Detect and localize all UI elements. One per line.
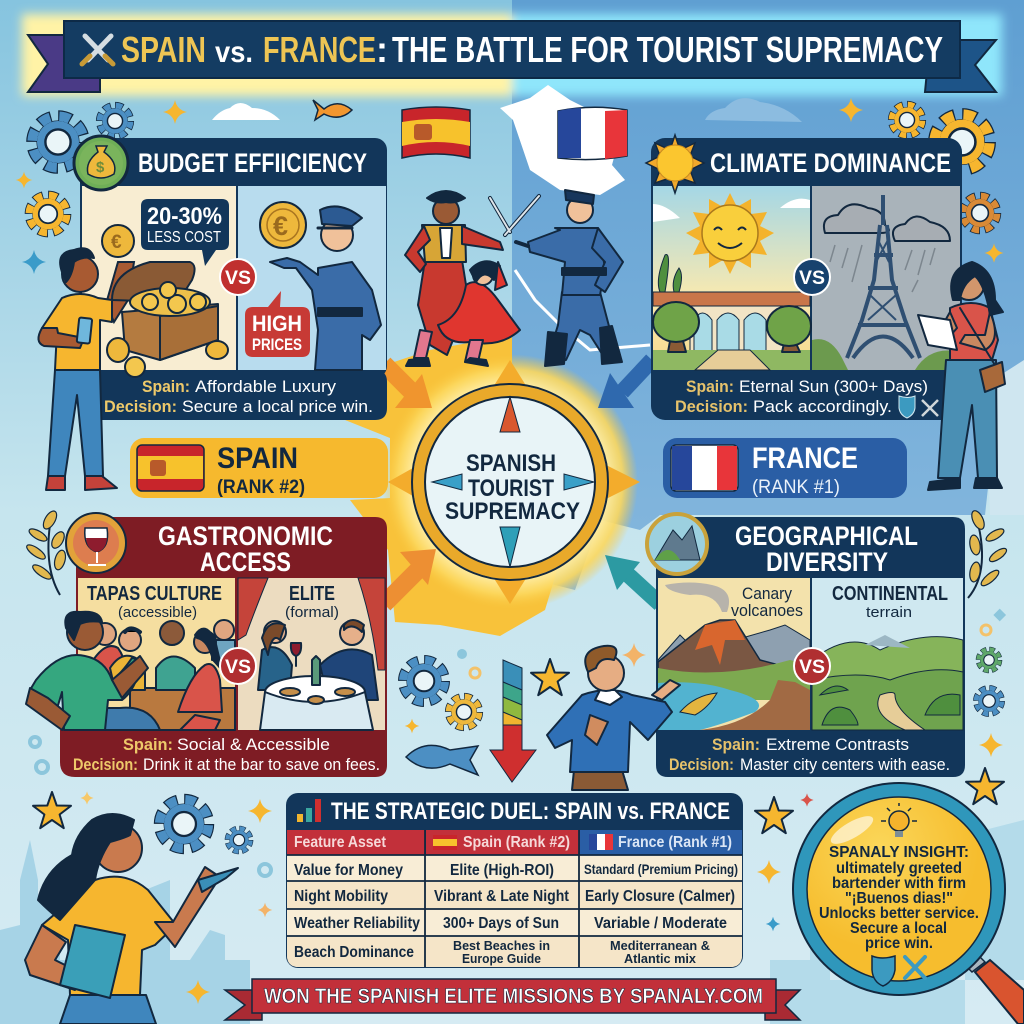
lens highlight <box>827 811 877 849</box>
compass ring <box>419 391 601 573</box>
bushes <box>820 686 960 725</box>
map: France white <box>500 85 625 195</box>
icon: swords <box>905 957 925 978</box>
flag: France <box>558 107 627 160</box>
figure: flamenco dancer <box>438 261 520 366</box>
vs badge <box>220 259 256 295</box>
climate caption: Pack accordingly. <box>753 397 892 416</box>
gastronomic caption: Decision: <box>73 755 138 774</box>
budget caption <box>104 377 373 416</box>
gear yellow middle <box>449 697 479 727</box>
budget caption: Spain: <box>142 377 190 396</box>
arrow: budget to compass <box>384 364 432 408</box>
flag icon France <box>671 445 738 491</box>
gear blue bottom <box>159 799 209 849</box>
panel: climate dominance <box>646 135 962 420</box>
sparkle near gears <box>405 719 419 733</box>
column labels <box>294 834 732 851</box>
tapas crowd <box>90 620 235 730</box>
figure: crossed swords <box>490 196 539 235</box>
compass text 1: SPANISH <box>466 450 556 477</box>
cloud top right <box>705 98 802 122</box>
Spain rank: (RANK #2) <box>217 477 305 498</box>
fish shape <box>680 693 717 715</box>
figure: man in green <box>26 612 148 730</box>
table cells: Europe Guide <box>462 951 541 966</box>
coin: left: € <box>111 232 122 253</box>
icon: green check gear <box>978 649 1000 671</box>
formal label: (formal) <box>285 604 339 621</box>
compass arrow south <box>500 527 520 567</box>
gear yellow top right <box>892 105 922 135</box>
prices label: PRICES <box>252 335 302 354</box>
sparkle blue left <box>22 250 46 274</box>
table cells <box>294 861 738 966</box>
gastronomic heading 1: GASTRONOMIC <box>158 521 333 551</box>
column labels: Feature Asset <box>294 834 387 851</box>
table cells: Night Mobility <box>294 888 388 905</box>
icon: small swords <box>922 400 938 416</box>
fish blue <box>406 745 478 775</box>
elite image <box>238 578 385 730</box>
star left bottom <box>33 792 71 828</box>
arrow: geographic to compass <box>605 555 660 604</box>
label: France rank <box>663 438 907 498</box>
sparkle table right <box>757 860 781 884</box>
insight body: "¡Buenos dias!" <box>845 890 953 907</box>
icon: sun badge <box>646 135 704 193</box>
small rings middle <box>457 649 480 678</box>
panel: budget efficiency <box>38 136 387 490</box>
sparkle top right <box>839 98 863 122</box>
figure: woman with clipboard <box>25 814 238 1024</box>
down arrow <box>490 660 536 782</box>
ground <box>653 350 810 370</box>
table: strategic duel <box>286 793 743 968</box>
vs badge: VS <box>225 268 251 289</box>
cloud spain <box>653 199 810 222</box>
elite diners <box>258 620 378 730</box>
vs badge <box>794 259 830 295</box>
panel: gastronomic access <box>26 513 387 777</box>
icon: shield <box>872 956 895 986</box>
sparkle small red <box>800 793 814 807</box>
star table right <box>755 797 793 833</box>
sparkle top <box>163 100 187 124</box>
icon: bars <box>297 799 321 822</box>
fish top <box>313 100 352 120</box>
insight body: ultimately greeted <box>836 860 962 877</box>
sparkle bottom <box>248 799 272 823</box>
arcade <box>653 292 810 352</box>
bottom banner <box>225 979 800 1020</box>
canary label: Canary <box>742 584 792 603</box>
elite label: ELITE <box>289 583 335 605</box>
title: colon: : <box>376 29 388 70</box>
sparkle bottom 3 <box>186 980 210 1004</box>
terrain label: terrain <box>866 604 912 621</box>
figure: French officer <box>516 190 623 366</box>
sparkle bottom 2 <box>258 903 272 917</box>
figure: pointing man <box>547 646 680 790</box>
arrow: gastronomic to compass <box>384 549 436 604</box>
France rank: (RANK #1) <box>752 477 840 498</box>
icon: money bag: $ <box>96 159 105 176</box>
high label: HIGH <box>252 311 302 336</box>
figure: price officer <box>270 206 381 370</box>
gear blue far right <box>976 688 1002 714</box>
compass arrow east <box>564 474 594 490</box>
geographic caption: Master city centers with ease. <box>740 755 950 774</box>
Eiffel tower <box>847 195 920 358</box>
panel: geographical diversity <box>647 514 965 777</box>
insight body <box>819 860 979 952</box>
sparkle teal <box>766 917 780 931</box>
gastronomic caption: Drink it at the bar to save on fees. <box>143 755 380 774</box>
icon: light bulb <box>881 803 917 837</box>
volcano image <box>658 578 810 730</box>
magnifier insight <box>793 783 1024 1024</box>
geographical heading 2: DIVERSITY <box>766 547 888 577</box>
accessible label: (accessible) <box>118 604 197 621</box>
figure: torero <box>405 191 503 366</box>
table cells: Beach Dominance <box>294 944 414 961</box>
icon: wine <box>66 513 126 573</box>
coin: left <box>102 225 134 257</box>
geographic caption: Extreme Contrasts <box>766 735 909 754</box>
table cells: Early Closure (Calmer) <box>585 888 735 905</box>
column labels: France (Rank #1) <box>618 834 732 851</box>
sparkle far right <box>979 733 1003 757</box>
cloud top left <box>212 103 280 120</box>
vs badge <box>794 648 830 684</box>
tapas image <box>78 578 235 730</box>
olive tree left <box>653 302 699 352</box>
title glow <box>22 14 1002 96</box>
table cells: Weather Reliability <box>294 915 420 932</box>
table cells: Best Beaches in <box>453 938 550 953</box>
title: vs: vs. <box>215 36 253 69</box>
callout: high prices <box>245 291 310 357</box>
compass points <box>388 360 640 604</box>
climate left image <box>653 186 810 370</box>
smoke <box>665 582 729 612</box>
compass text 2: TOURIST <box>468 475 554 502</box>
rain clouds <box>824 204 950 241</box>
hills <box>812 637 963 730</box>
small rings left <box>30 737 48 773</box>
coin: right: € <box>273 211 288 241</box>
continental image <box>812 578 963 730</box>
geographic caption: Spain: <box>712 735 760 754</box>
budget caption: Decision: <box>104 397 177 416</box>
less cost number: 20-30% <box>147 203 222 230</box>
arrow: climate to compass <box>598 360 652 408</box>
budget caption: Affordable Luxury <box>195 377 337 396</box>
insight body: price win. <box>865 935 933 952</box>
smiling sun <box>686 193 774 274</box>
table cells: 300+ Days of Sun <box>443 915 559 932</box>
bush <box>812 339 960 370</box>
figure: traveller man <box>38 248 117 490</box>
compass glow <box>382 354 638 610</box>
olive tree right <box>767 306 811 352</box>
climate caption: Decision: <box>675 397 748 416</box>
figure: woman with map <box>918 262 1005 490</box>
path <box>695 350 770 370</box>
budget left image <box>82 186 236 370</box>
small marks right <box>981 609 1006 635</box>
geographic caption <box>669 735 950 774</box>
vs badge: VS <box>799 268 825 289</box>
volcanoes label: volcanoes <box>731 601 803 620</box>
flag France small <box>589 834 613 850</box>
title banner <box>28 21 996 92</box>
climate caption: Spain: <box>686 377 734 396</box>
figure arm raised <box>106 262 134 322</box>
sparkle left bottom <box>80 791 94 805</box>
volcano <box>658 620 790 690</box>
table body <box>287 830 742 967</box>
coin: right <box>260 202 306 248</box>
flag icon Spain <box>137 445 204 491</box>
climate caption: Eternal Sun (300+ Days) <box>739 377 928 396</box>
gastronomic caption <box>73 735 380 774</box>
banner text: WON THE SPANISH ELITE MISSIONS BY SPANALY.COM <box>264 985 763 1008</box>
budget heading: BUDGET EFFIICIENCY <box>138 148 367 178</box>
table cells: Value for Money <box>294 862 403 879</box>
table header row <box>287 830 742 855</box>
table cells: Mediterranean & <box>610 938 710 953</box>
compass arrow north <box>500 397 520 432</box>
flag: Spain <box>402 107 470 158</box>
geographic caption: Decision: <box>669 755 734 774</box>
Spain name: SPAIN <box>217 442 298 475</box>
cypress trees <box>658 254 682 292</box>
river road <box>878 692 925 730</box>
icon: shield <box>899 396 915 418</box>
title: France: FRANCE <box>263 29 376 70</box>
mountains back <box>658 625 810 680</box>
gastronomic caption: Spain: <box>123 735 173 754</box>
flag Spain small <box>433 835 457 850</box>
treasure chest <box>107 262 228 377</box>
table cells: Variable / Moderate <box>594 915 727 932</box>
gear blue small <box>100 106 130 136</box>
gastronomic heading 2: ACCESS <box>200 547 291 577</box>
compass <box>382 354 640 610</box>
icon: crossed swords <box>82 36 113 64</box>
budget right image <box>238 186 386 370</box>
table cells: Standard (Premium Pricing) <box>584 861 738 877</box>
vs badge: VS <box>225 657 251 678</box>
magnifier ring <box>800 790 998 988</box>
title: Spain: SPAIN <box>121 29 206 70</box>
far hill <box>865 635 910 648</box>
ring small <box>259 864 271 876</box>
water <box>658 682 759 730</box>
gear orange right <box>963 196 997 230</box>
gear blue middle <box>403 660 445 702</box>
sand cliff <box>700 680 810 730</box>
icon: mountain badge <box>647 514 707 574</box>
insight body: bartender with firm <box>832 875 966 892</box>
star middle <box>531 659 569 695</box>
insight body: Secure a local <box>850 920 947 937</box>
caption strip <box>60 730 387 777</box>
map: France coast line <box>515 270 650 350</box>
magnifier handle <box>975 960 1024 1024</box>
callout: less cost <box>141 199 229 266</box>
compass arrow west <box>432 474 462 490</box>
compass text 3: SUPREMACY <box>445 498 580 525</box>
climate heading: CLIMATE DOMINANCE <box>710 148 951 178</box>
laurel right <box>968 509 1008 598</box>
gear yellow right <box>934 114 990 170</box>
table cells: Vibrant & Late Night <box>434 888 570 905</box>
icon: money bag <box>74 136 128 190</box>
table cells: Elite (High-ROI) <box>450 862 554 879</box>
column labels: Spain (Rank #2) <box>463 834 570 851</box>
budget caption: Secure a local price win. <box>182 397 373 416</box>
laurel left <box>25 509 67 595</box>
France name: FRANCE <box>752 442 858 475</box>
sparkle right <box>984 243 1004 263</box>
tapas label: TAPAS CULTURE <box>87 583 222 605</box>
gear blue small bottom <box>227 828 251 852</box>
meadow <box>658 660 810 700</box>
gastronomic caption: Social & Accessible <box>177 735 330 754</box>
lava <box>695 620 745 665</box>
curtains <box>238 578 385 670</box>
map: Spain glow <box>345 335 560 636</box>
hills front <box>812 670 963 730</box>
star far right <box>966 768 1004 804</box>
label: Spain rank <box>130 438 388 498</box>
vs badge: VS <box>799 657 825 678</box>
gear blue large <box>32 116 84 168</box>
climate caption <box>675 377 928 416</box>
climate right image <box>812 186 960 370</box>
sparkle middle <box>622 643 646 667</box>
sparkle left <box>16 172 32 188</box>
table heading: THE STRATEGIC DUEL: SPAIN vs. FRANCE <box>331 798 730 825</box>
vs badge <box>220 648 256 684</box>
table cells: Atlantic mix <box>624 951 697 966</box>
rain lines <box>830 245 935 292</box>
continental label: CONTINENTAL <box>832 583 948 605</box>
insight heading: SPANALY INSIGHT: <box>829 844 969 861</box>
geographical heading 1: GEOGRAPHICAL <box>735 521 918 551</box>
insight body: Unlocks better service. <box>819 905 979 922</box>
budget caption strip <box>100 370 387 420</box>
gear yellow left <box>29 195 67 233</box>
less cost label: LESS COST <box>147 229 221 246</box>
